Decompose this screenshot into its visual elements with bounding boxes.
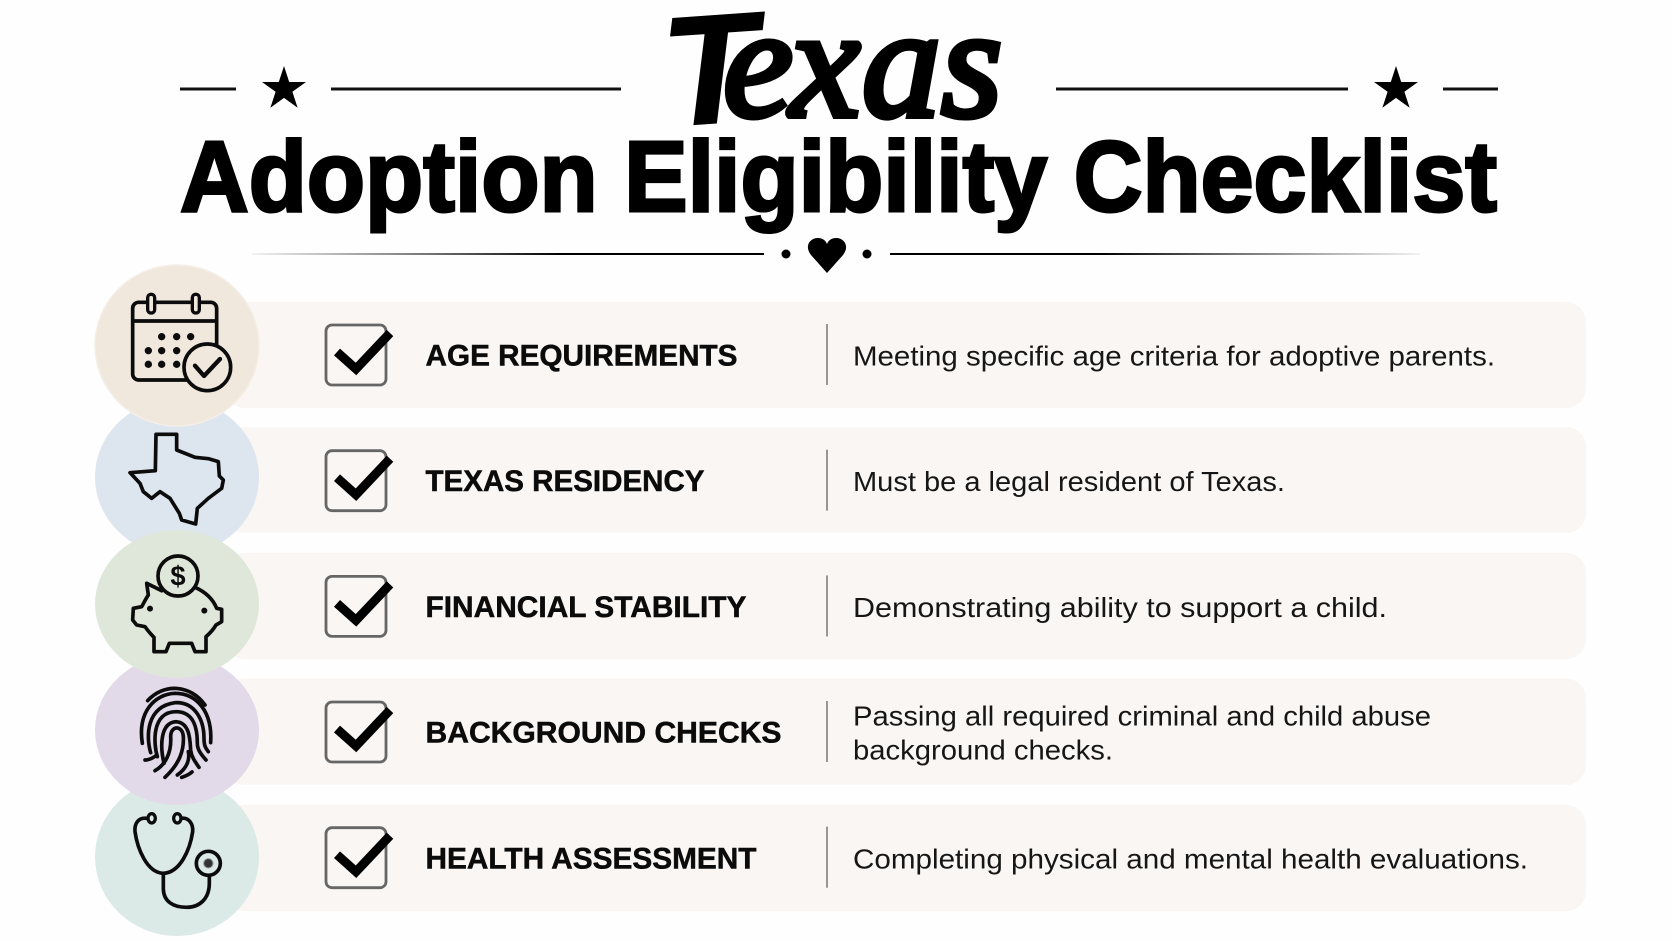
description: Passing all required criminal and child abuse bbox=[853, 701, 1431, 732]
title: Adoption Eligibility Checklist: Adoption Eligibility Checklist bbox=[180, 121, 1497, 233]
heading: TEXAS RESIDENCY bbox=[426, 465, 704, 498]
script title: Texas bbox=[656, 0, 1002, 160]
checkbox bbox=[326, 325, 390, 385]
icon: fingerprint in purple circle bbox=[95, 655, 259, 805]
description: Completing physical and mental health evaluations. bbox=[853, 843, 1528, 874]
row: health assessment bbox=[225, 805, 1586, 911]
description: Demonstrating ability to support a child. bbox=[853, 592, 1387, 623]
description: Must be a legal resident of Texas. bbox=[853, 466, 1285, 497]
icon: piggy bank with coin in green circle: $ bbox=[170, 561, 186, 592]
heading: BACKGROUND CHECKS bbox=[426, 716, 782, 750]
icon: stethoscope in teal circle bbox=[95, 778, 259, 936]
row: financial stability bbox=[225, 553, 1586, 659]
row: background checks bbox=[225, 678, 1586, 785]
checkbox bbox=[326, 451, 390, 511]
checkbox bbox=[326, 576, 390, 636]
icon: texas outline in blue circle bbox=[95, 399, 259, 555]
ornament: left star and lines bbox=[180, 66, 621, 108]
checkbox bbox=[326, 828, 390, 888]
checkbox bbox=[326, 702, 390, 762]
ornament: right star and lines bbox=[1056, 66, 1498, 108]
icon: calendar with check in beige circle bbox=[95, 265, 259, 426]
description: background checks. bbox=[853, 734, 1113, 765]
row: age requirements bbox=[225, 302, 1586, 408]
description: Meeting specific age criteria for adoptive parents. bbox=[853, 340, 1495, 372]
heading: HEALTH ASSESSMENT bbox=[426, 842, 756, 875]
row: texas residency bbox=[225, 427, 1586, 533]
heart divider bbox=[252, 238, 1420, 273]
icon: piggy bank with coin in green circle bbox=[95, 530, 259, 678]
heading: FINANCIAL STABILITY bbox=[426, 591, 746, 624]
heading: AGE REQUIREMENTS bbox=[426, 340, 738, 372]
